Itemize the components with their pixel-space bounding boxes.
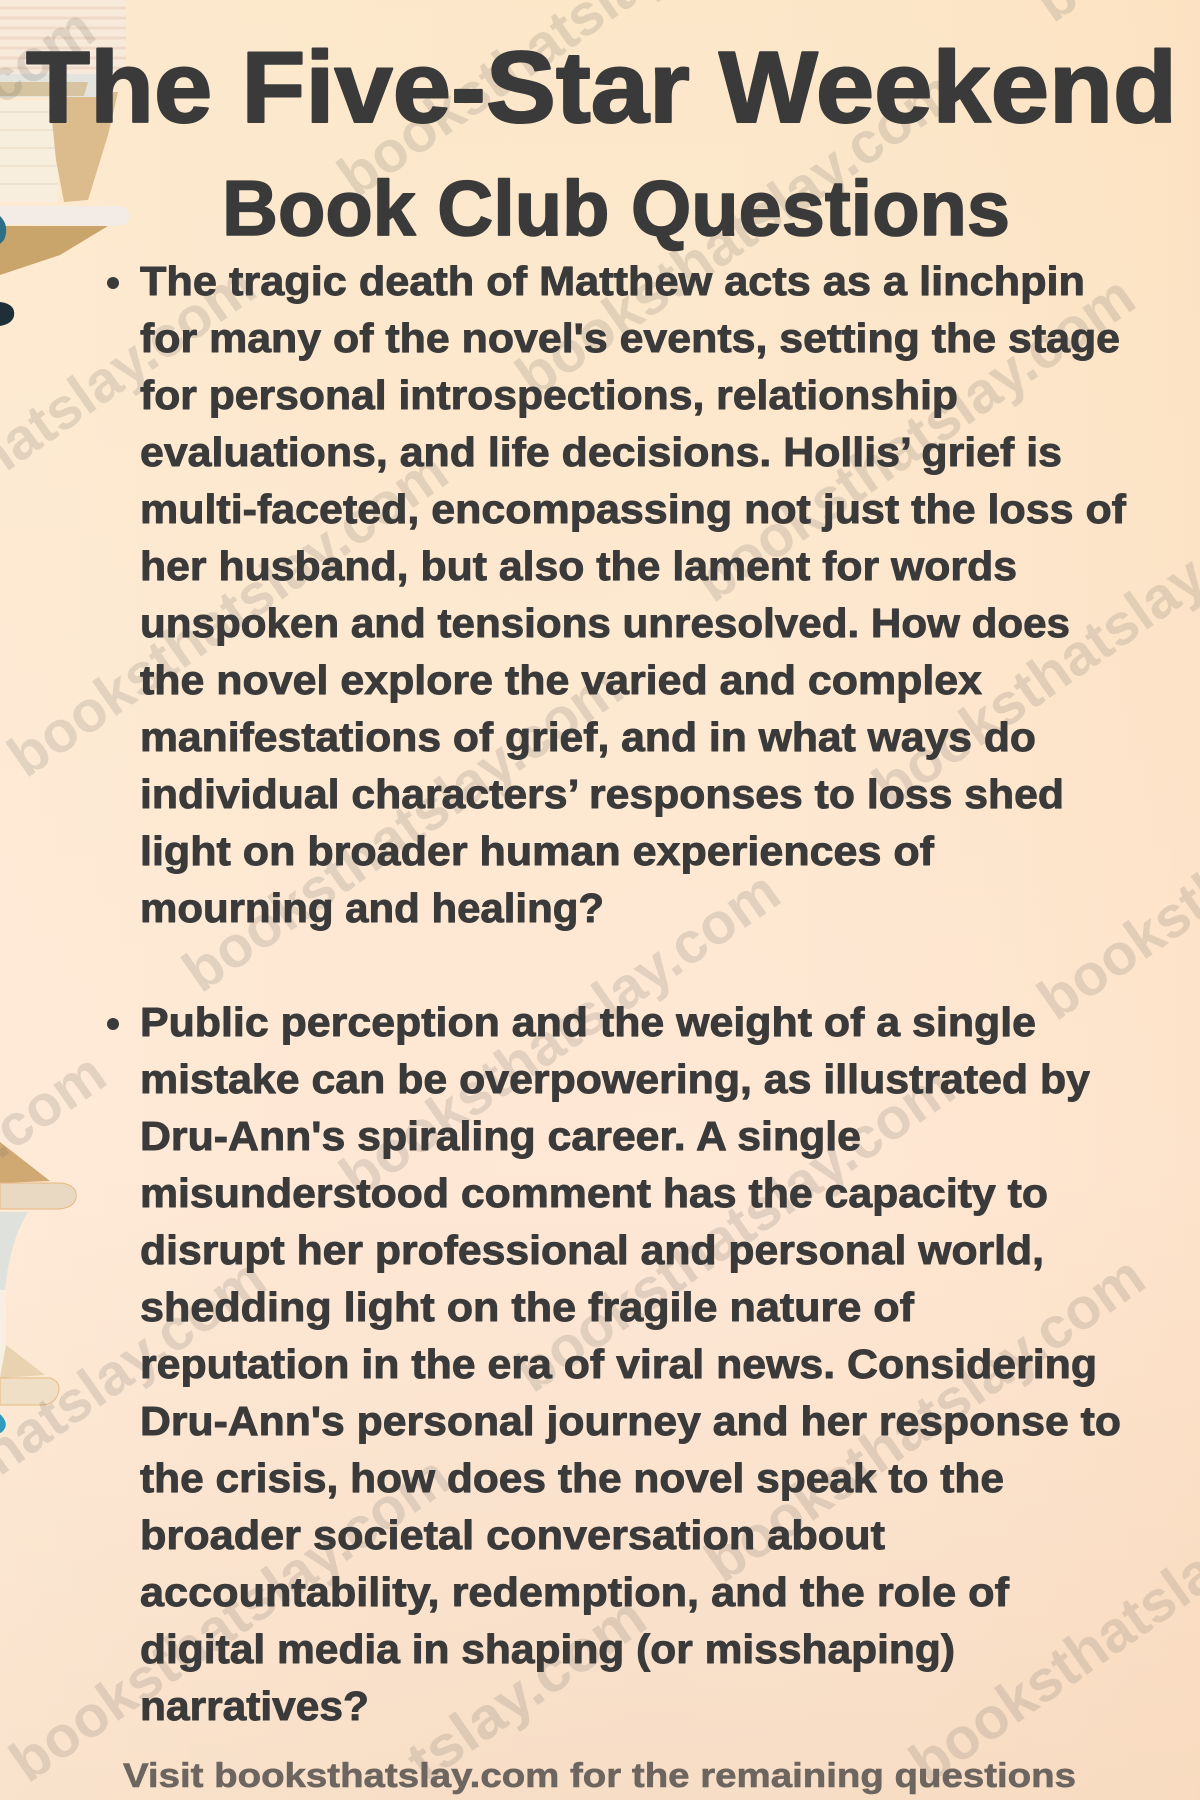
question 2 text: shedding light on the fragile nature of	[140, 1284, 914, 1330]
question 1 text: unspoken and tensions unresolved. How does	[140, 600, 1070, 646]
watermark pattern: booksthatslay.com	[0, 1443, 461, 1795]
bullet	[107, 1018, 119, 1030]
footer call to action: Visit booksthatslay.com for the remaining questions	[123, 1757, 1076, 1795]
question 2 text: the crisis, how does the novel speak to the	[140, 1455, 1004, 1501]
question 2 text: reputation in the era of viral news. Considering	[140, 1341, 1097, 1387]
question 1 text: for personal introspections, relationship	[140, 372, 958, 418]
question 2 text: Public perception and the weight of a single	[140, 999, 1036, 1045]
question 2 text	[140, 999, 1121, 1729]
question 1 text	[140, 258, 1126, 931]
question 2 text: broader societal conversation about	[140, 1512, 885, 1558]
question 2 text: disrupt her professional and personal world,	[140, 1227, 1044, 1273]
watermark pattern: booksthatslay.com	[504, 58, 967, 410]
question 1 text: mourning and healing?	[140, 885, 604, 931]
question 2 text: misunderstood comment has the capacity to	[140, 1170, 1048, 1216]
watermark pattern: booksthatslay.com	[503, 1053, 966, 1405]
watermark pattern: booksthatslay.com	[0, 438, 459, 790]
watermark pattern: booksthatslay.com	[693, 1243, 1156, 1595]
watermark pattern: booksthatslay.com	[171, 653, 634, 1005]
subtitle: Book Club Questions	[222, 164, 1010, 252]
question 1 text: multi-faceted, encompassing not just the loss of	[140, 486, 1126, 532]
question 1 text: The tragic death of Matthew acts as a linchpin	[140, 258, 1085, 304]
bullet	[107, 277, 119, 289]
question 2 text: narratives?	[140, 1683, 369, 1729]
question 2 text: digital media in shaping (or misshaping)	[140, 1626, 955, 1672]
title: The Five-Star Weekend	[26, 32, 1177, 144]
question 1 text: individual characters’ responses to loss shed	[140, 771, 1064, 817]
question 1 text: for many of the novel's events, setting the stage	[140, 315, 1120, 361]
question 2 text: Dru-Ann's personal journey and her response to	[140, 1398, 1121, 1444]
question 2 text: Dru-Ann's spiraling career. A single	[140, 1113, 861, 1159]
illustration: top stack of books at left edge	[0, 0, 129, 326]
question 1 text: evaluations, and life decisions. Hollis’ grief is	[140, 429, 1062, 475]
question 1 text: manifestations of grief, and in what ways do	[140, 714, 1036, 760]
watermark pattern: booksthatslay.com	[683, 263, 1146, 615]
watermark pattern: tslay.com	[395, 1584, 658, 1795]
panel: question 1	[107, 258, 1126, 931]
question 2 text: mistake can be overpowering, as illustrated by	[140, 1056, 1090, 1102]
panel: question 2	[107, 999, 1121, 1729]
question 2 text: accountability, redemption, and the role of	[140, 1569, 1009, 1615]
question 1 text: the novel explore the varied and complex	[140, 657, 982, 703]
question 1 text: light on broader human experiences of	[140, 828, 934, 874]
watermark pattern: booksthatslay.com	[328, 858, 791, 1210]
question 1 text: her husband, but also the lament for words	[140, 543, 1017, 589]
illustration: lower stack of books at left edge	[0, 1142, 76, 1433]
